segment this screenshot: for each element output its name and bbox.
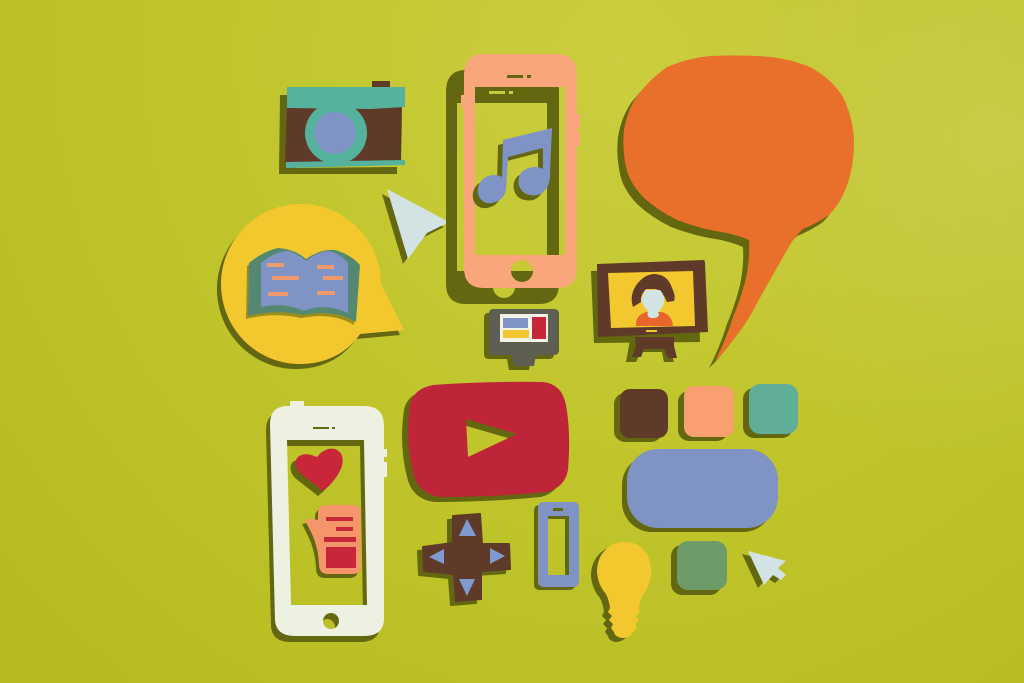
icon: camera xyxy=(279,81,405,174)
icon: blue rounded bar xyxy=(622,449,778,532)
easel xyxy=(632,337,677,358)
person xyxy=(632,274,675,326)
open book xyxy=(246,248,360,325)
orange square xyxy=(678,386,734,441)
frame xyxy=(597,260,708,337)
icon: small monitor xyxy=(484,309,559,370)
chat bubble xyxy=(302,505,361,578)
icon group: app squares xyxy=(614,384,798,442)
icon: orange speech bubble xyxy=(617,56,854,368)
icon: white arrow pointer xyxy=(382,189,449,264)
icon: game d-pad xyxy=(418,514,510,605)
icon: small blue phone xyxy=(534,502,579,590)
book text lines xyxy=(267,263,343,296)
icon: white phone with heart and chat xyxy=(266,401,387,642)
icon: presentation screen with person xyxy=(591,260,708,362)
icon: red play button xyxy=(402,382,569,502)
icon: orange phone with music note xyxy=(446,54,580,304)
icon: yellow speech bubble with book xyxy=(217,204,404,369)
teal square xyxy=(743,384,798,438)
heart xyxy=(291,449,343,496)
brown square xyxy=(614,389,668,442)
icon: light bulb xyxy=(591,542,651,642)
icon: green square xyxy=(671,541,727,595)
bubble shape xyxy=(221,204,404,364)
icon: white mouse cursor xyxy=(742,551,786,588)
music note xyxy=(473,128,552,208)
